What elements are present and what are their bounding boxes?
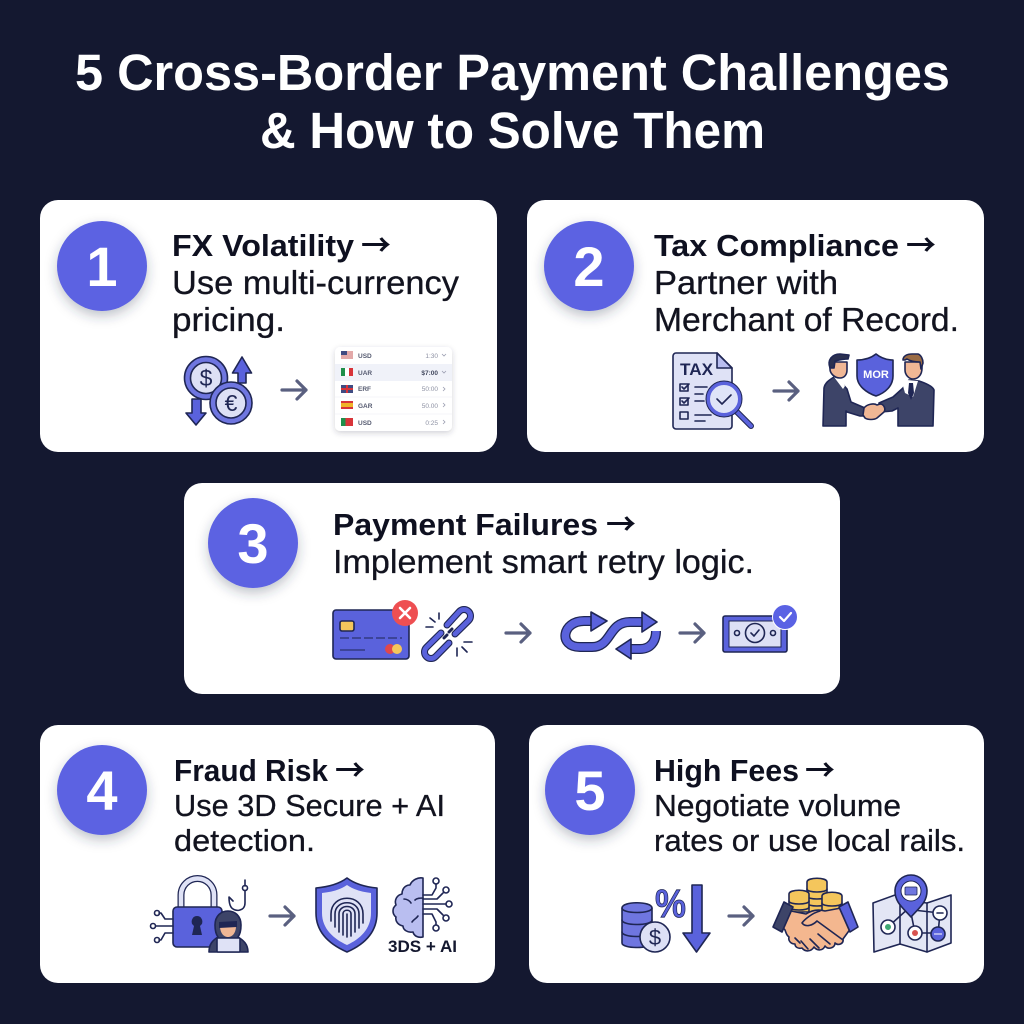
icon: tax document	[673, 353, 751, 429]
text: high fees	[654, 746, 965, 858]
text: fraud risk: Use 3D Secure + AI	[174, 788, 445, 823]
icon: handshake with coins	[773, 878, 858, 951]
title: 5 Cross-Border Payment Challenges	[75, 44, 950, 101]
number badge 1: 1	[86, 235, 118, 298]
currency table: GAR	[358, 403, 373, 410]
icon: approved payment	[723, 604, 798, 652]
text: FX volatility: Use multi-currency	[172, 264, 460, 301]
text: payment failures: Payment Failures	[333, 507, 598, 542]
icon: smart retry loop	[565, 612, 657, 659]
currency table: 0:25	[425, 420, 438, 427]
icon: fingerprint shield	[316, 878, 377, 952]
number badge 5: 5	[574, 759, 606, 822]
title	[75, 44, 950, 159]
number badge 1	[57, 221, 147, 311]
panel: fraud risk	[40, 725, 495, 983]
text: high fees: →	[805, 746, 835, 790]
text: high fees: rates or use local rails.	[654, 823, 965, 858]
text: FX volatility: pricing.	[172, 301, 285, 338]
icon: currency coins	[184, 356, 252, 425]
currency table: 50:00	[422, 386, 438, 393]
currency table	[335, 347, 452, 431]
title: & How to Solve Them	[260, 102, 765, 159]
currency table: USD	[358, 353, 372, 360]
number badge 4: 4	[86, 759, 118, 822]
currency table: 1:30	[425, 353, 438, 360]
icon: AI brain circuit	[388, 878, 457, 956]
text: fraud risk: detection.	[174, 823, 315, 858]
label: 3DS + AI: 3DS + AI	[388, 938, 457, 956]
text: fraud risk	[174, 746, 445, 858]
currency table: USD	[358, 420, 372, 427]
text: tax compliance	[654, 221, 959, 338]
text: FX volatility	[172, 221, 460, 338]
text: fraud risk: →	[335, 746, 365, 790]
icon: merchant of record handshake	[823, 354, 934, 426]
panel: FX volatility	[40, 200, 497, 452]
icon: lower percentage fees: $	[649, 925, 661, 950]
icon: broken chain	[424, 609, 472, 659]
number badge 5	[545, 745, 635, 835]
text: payment failures	[333, 500, 754, 580]
text: high fees: Negotiate volume	[654, 788, 901, 823]
icon: failed credit card	[333, 600, 418, 659]
arrow	[270, 907, 294, 925]
text: tax compliance: →	[906, 221, 936, 265]
icon: locked padlock with hacker	[150, 878, 248, 952]
text: fraud risk: Fraud Risk	[174, 753, 329, 788]
arrow	[282, 381, 306, 399]
currency table: $7:00	[421, 370, 438, 377]
currency table: 50.00	[422, 403, 438, 410]
arrow	[506, 624, 530, 642]
arrow	[729, 907, 753, 925]
number badge 3: 3	[237, 512, 269, 575]
panel: payment failures	[184, 483, 840, 694]
arrow	[680, 624, 704, 642]
icon: local rails map	[873, 875, 951, 952]
icon: tax document: TAX	[680, 360, 714, 379]
text: payment failures: Implement smart retry logic.	[333, 543, 754, 580]
text: tax compliance: Tax Compliance	[654, 228, 899, 263]
text: high fees: High Fees	[654, 753, 799, 788]
text: tax compliance: Partner with	[654, 264, 838, 301]
number badge 2	[544, 221, 634, 311]
text: tax compliance: Merchant of Record.	[654, 301, 959, 338]
text: FX volatility: →	[361, 221, 391, 265]
text: FX volatility: FX Volatility	[172, 228, 355, 263]
icon: currency coins: €	[225, 390, 238, 416]
icon: currency coins: $	[200, 365, 213, 391]
icon: merchant of record handshake: MOR	[863, 369, 889, 381]
number badge 4	[57, 745, 147, 835]
currency table: UAR	[358, 370, 372, 377]
arrow	[774, 382, 798, 400]
panel: high fees	[529, 725, 984, 983]
number badge 2: 2	[573, 235, 605, 298]
currency table: ERF	[358, 386, 371, 393]
icon: lower percentage fees	[622, 882, 710, 952]
number badge 3	[208, 498, 298, 588]
icon: lower percentage fees: %	[655, 882, 686, 926]
panel: tax compliance	[527, 200, 984, 452]
text: payment failures: →	[606, 500, 636, 544]
